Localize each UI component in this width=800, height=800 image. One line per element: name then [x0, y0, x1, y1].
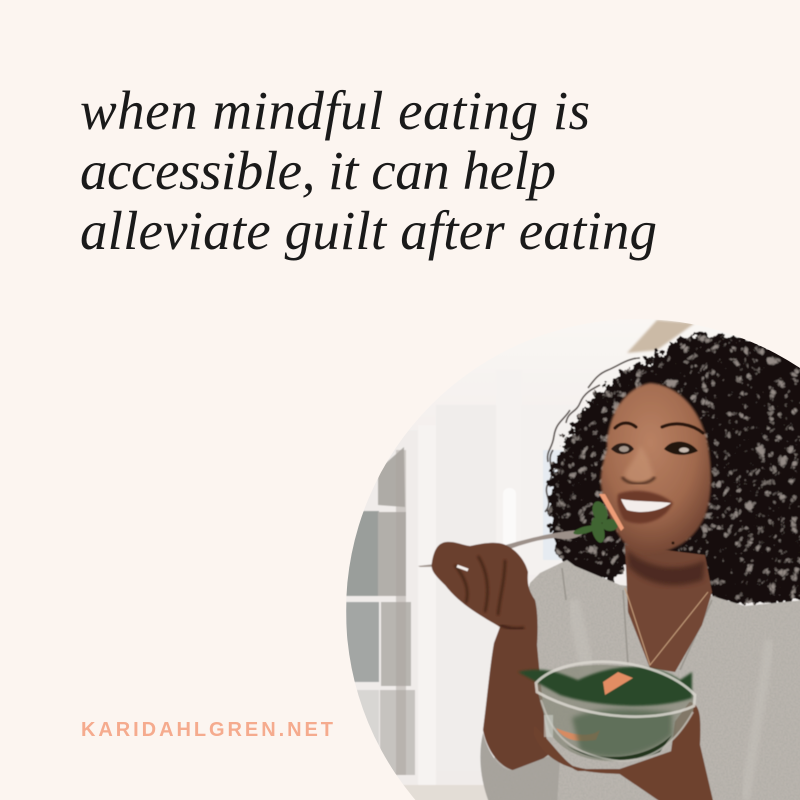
photo: neck and chest — [625, 545, 712, 672]
photo: woman eating salad in a circular crop — [340, 310, 800, 800]
photo background: bright room — [400, 320, 800, 800]
photo: hair — [550, 333, 800, 604]
title: alleviate guilt after eating — [80, 200, 657, 261]
photo: face — [601, 383, 711, 553]
photo: raised hand and forearm — [432, 542, 548, 770]
photo: window panes — [346, 430, 418, 780]
photo: fork with salad bite — [418, 494, 624, 567]
footer website: KARIDAHLGREN.NET — [81, 719, 333, 741]
photo: cardigan cuff — [480, 733, 560, 800]
title: when mindful eating is — [80, 80, 590, 141]
title: accessible, it can help — [80, 140, 556, 201]
photo: grey cardigan — [490, 560, 800, 800]
photo: hand under the bowl — [535, 703, 713, 800]
title — [80, 80, 657, 261]
photo: wispy hair edge — [544, 356, 640, 513]
photo: glass salad bowl — [518, 662, 695, 761]
